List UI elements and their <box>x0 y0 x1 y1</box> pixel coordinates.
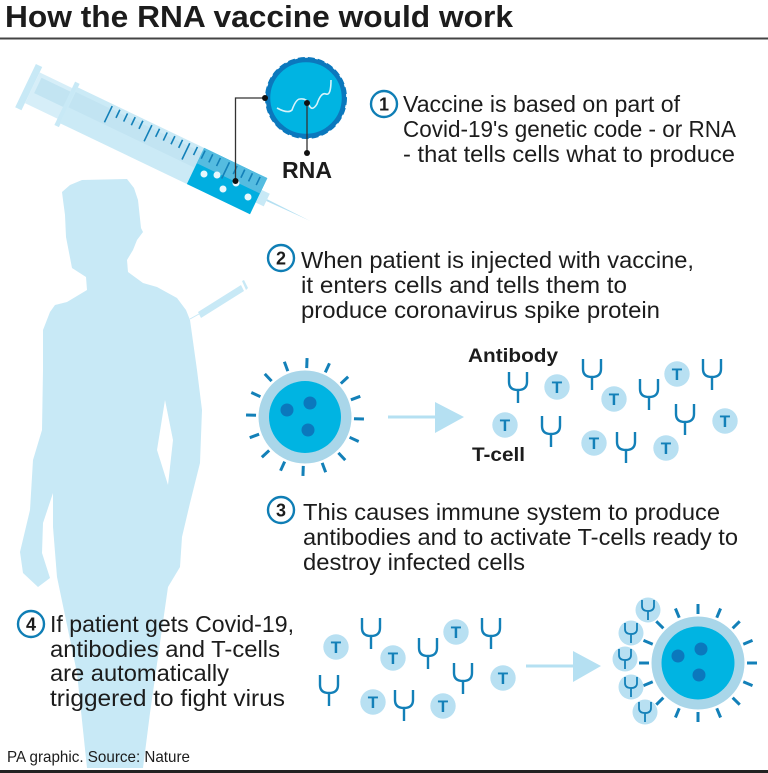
RNA particle <box>266 58 346 138</box>
attached antibodies on t-cells <box>612 598 660 724</box>
source: PA graphic. Source: Nature <box>7 749 190 766</box>
antibodies group 1 <box>509 359 721 463</box>
t-cells group 1: T <box>720 412 731 431</box>
small syringe at shoulder <box>190 280 248 319</box>
t-cell label: T-cell <box>472 444 525 466</box>
step 3 <box>268 497 738 575</box>
antibodies group 2 <box>320 618 500 721</box>
step 4: triggered to fight virus <box>50 685 285 711</box>
step 1: Vaccine is based on part of <box>403 91 681 117</box>
arrow 1 <box>388 402 464 433</box>
t-cells group 1 <box>492 361 738 461</box>
t-cells group 2 <box>323 619 516 719</box>
step 1: Covid-19's genetic code - or RNA <box>403 116 737 142</box>
step 2: When patient is injected with vaccine, <box>301 247 694 273</box>
t-cells group 1: T <box>552 378 563 397</box>
t-cells group 2: T <box>368 693 379 712</box>
t-cells group 1: T <box>500 416 511 435</box>
t-cells group 1: T <box>661 439 672 458</box>
step 4: are automatically <box>50 660 230 686</box>
liquid <box>187 148 267 214</box>
step 3: 3 <box>276 500 286 520</box>
arrow 2 <box>526 651 601 682</box>
t-cells group 1: T <box>672 365 683 384</box>
step 2: it enters cells and tells them to <box>301 272 627 298</box>
t-cells group 2: T <box>388 649 399 668</box>
t-cells group 2: T <box>331 638 342 657</box>
step 2: produce coronavirus spike protein <box>301 297 660 323</box>
infected cell <box>244 356 366 478</box>
step 1: - that tells cells what to produce <box>403 141 735 167</box>
step 4: 4 <box>26 614 36 634</box>
scale marks <box>104 106 260 193</box>
step 1 <box>371 91 737 167</box>
t-cells group 2: T <box>498 669 509 688</box>
step 2 <box>268 245 694 323</box>
RNA label: RNA <box>282 157 332 183</box>
gap between arm and torso <box>157 400 173 485</box>
t-cells group 1: T <box>589 434 600 453</box>
step 4: If patient gets Covid-19, <box>50 611 294 637</box>
liquid particles <box>200 170 252 200</box>
antibody label: Antibody <box>468 345 558 367</box>
step 3: antibodies and to activate T-cells ready to <box>303 524 738 550</box>
patient silhouette <box>20 179 202 768</box>
t-cells group 2: T <box>438 697 449 716</box>
step 4: antibodies and T-cells <box>50 636 280 662</box>
step 1: 1 <box>379 94 389 114</box>
title: How the RNA vaccine would work <box>5 0 514 34</box>
neutralised cell <box>639 604 757 722</box>
step 3: destroy infected cells <box>303 549 525 575</box>
large syringe <box>15 63 320 243</box>
step 3: This causes immune system to produce <box>303 499 720 525</box>
step 4 <box>18 611 294 711</box>
step 2: 2 <box>276 248 286 268</box>
t-cells group 1: T <box>609 390 620 409</box>
t-cells group 2: T <box>451 623 462 642</box>
leader lines <box>232 95 310 184</box>
